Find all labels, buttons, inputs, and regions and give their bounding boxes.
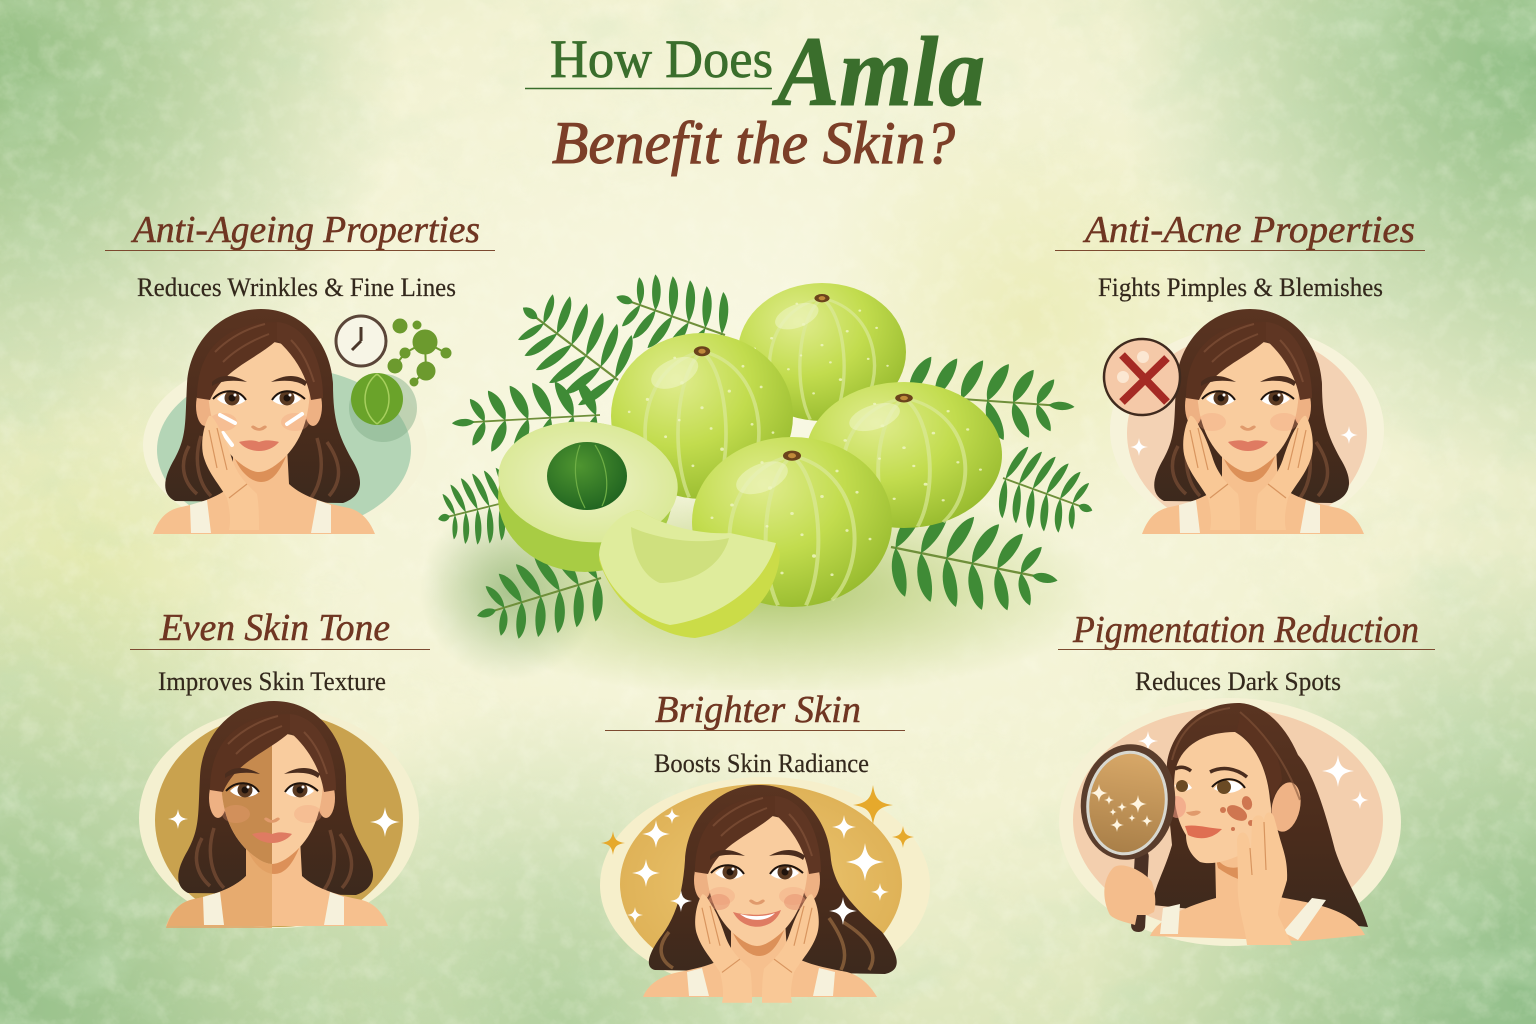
title: Benefit the Skin?	[552, 110, 955, 176]
title: How Does	[550, 29, 773, 89]
icon: clock	[336, 316, 386, 366]
woman with half-toned face	[166, 701, 388, 928]
woman with cream on cheek	[153, 309, 375, 534]
portrait: even skin tone	[139, 701, 419, 928]
smiling woman with hands on cheeks	[643, 785, 897, 1003]
hand on cheek	[1237, 812, 1292, 945]
woman with hands on cheeks	[1142, 309, 1364, 534]
sparkles	[1130, 426, 1358, 456]
sparkles	[168, 807, 400, 837]
heading: anti-acne: Anti-Acne Properties	[1082, 209, 1415, 251]
hand mirror	[1073, 738, 1183, 932]
heading: pigmentation reduction: Reduces Dark Spots	[1135, 667, 1341, 696]
amla wedge	[599, 510, 780, 638]
central amla fruit illustration	[400, 259, 1140, 690]
amla leaves	[429, 259, 1105, 654]
heading: pigmentation reduction: Pigmentation Reduction	[1072, 609, 1419, 651]
title: Amla	[771, 16, 985, 127]
heading: anti-ageing: Reduces Wrinkles & Fine Lines	[137, 273, 456, 302]
icon: small amla	[349, 373, 417, 442]
heading: anti-acne	[1055, 209, 1425, 302]
whole amla fruits	[611, 283, 1002, 607]
heading: brighter skin: Boosts Skin Radiance	[654, 749, 869, 778]
heading: brighter skin: Brighter Skin	[655, 689, 861, 731]
portrait: pigmentation reduction	[1059, 698, 1401, 946]
heading: anti-ageing	[105, 209, 495, 302]
heading: even skin tone: Even Skin Tone	[159, 607, 390, 649]
dark spots	[1220, 795, 1254, 831]
title	[525, 16, 985, 176]
heading: pigmentation reduction	[1058, 609, 1435, 696]
portrait: anti-ageing	[143, 309, 451, 535]
heading: brighter skin	[605, 689, 905, 778]
icon: molecule	[388, 319, 451, 386]
heading: anti-acne: Fights Pimples & Blemishes	[1098, 273, 1383, 302]
sparkles	[1138, 731, 1369, 809]
heading: even skin tone: Improves Skin Texture	[158, 667, 386, 696]
sparkle on hair	[670, 890, 857, 925]
heading: anti-ageing: Anti-Ageing Properties	[130, 209, 480, 251]
woman in three-quarter profile	[1150, 703, 1368, 945]
portrait: brighter skin	[600, 777, 930, 1003]
halved amla with seed	[492, 413, 684, 572]
icon: crossed-out acne	[1104, 339, 1180, 415]
heading: even skin tone	[130, 607, 430, 696]
sparkles	[601, 785, 914, 923]
portrait: anti-acne	[1104, 309, 1384, 534]
